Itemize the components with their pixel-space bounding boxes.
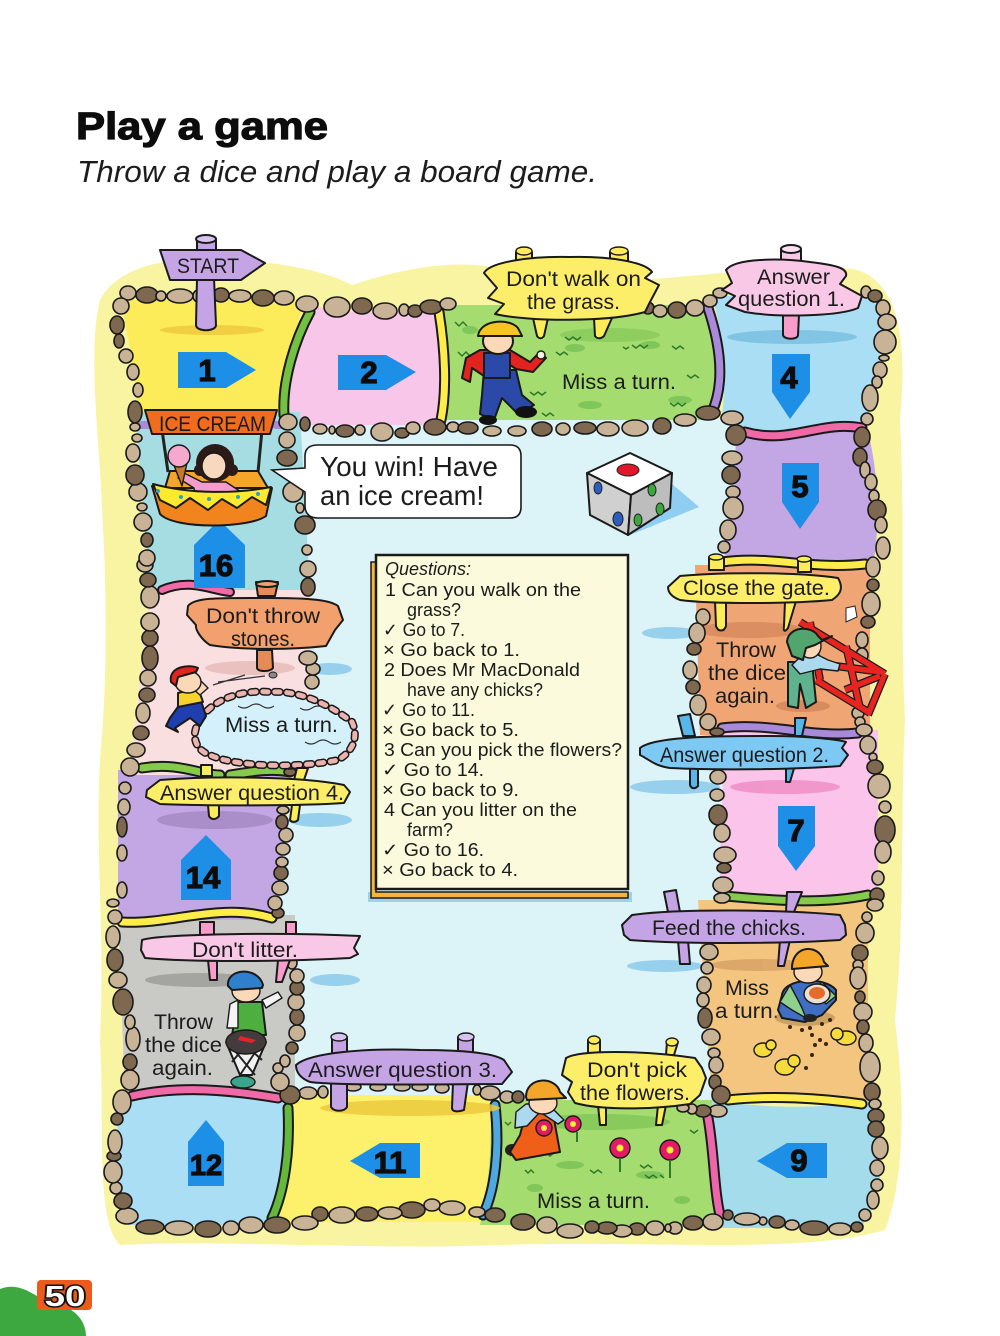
tile dividers	[122, 308, 868, 1218]
chicks and grain	[754, 1020, 856, 1075]
arrow 11: 11	[374, 1145, 406, 1180]
arrow 12	[188, 1120, 224, 1186]
pond: Miss a turn.	[225, 714, 338, 737]
sign: answer question 2: Answer question 2.	[660, 744, 829, 767]
tile 7	[720, 730, 878, 905]
sign shadows on the ground	[145, 325, 857, 1130]
text: miss a turn tile 3: Miss a turn.	[562, 371, 676, 394]
questions book: farm?	[407, 820, 453, 840]
arrow 4	[772, 354, 810, 419]
questions book: ✓ Go to 7.	[383, 620, 465, 640]
text: throw the dice again tile 6: the dice	[708, 662, 786, 685]
start sign	[160, 235, 265, 330]
dice	[587, 453, 699, 535]
speech bubble: You win! Have	[320, 451, 498, 482]
sign: close the gate	[668, 554, 841, 631]
board tiles	[117, 296, 881, 1228]
sign: don't pick the flowers	[562, 1036, 706, 1125]
character: farmer feeding chicks	[775, 949, 836, 1026]
arrow 2	[338, 355, 416, 390]
text: throw the dice again tile 13: again.	[152, 1057, 213, 1080]
board background	[94, 260, 905, 1246]
arrow 9	[757, 1143, 827, 1178]
sign: answer question 3: Answer question 3.	[308, 1059, 497, 1082]
arrow 9: 9	[790, 1143, 808, 1178]
arrow 5: 5	[791, 469, 809, 504]
questions book	[368, 555, 632, 902]
arrow 4: 4	[780, 360, 798, 395]
sign: answer question 1: Answer	[757, 266, 830, 289]
character: boy with gate	[776, 606, 885, 715]
tile 10	[480, 1100, 715, 1225]
sign: answer question 1: question 1.	[738, 288, 845, 311]
text: miss a turn tile 8: a turn.	[715, 1000, 779, 1023]
tile 9	[708, 1100, 881, 1228]
text: throw the dice again tile 13	[145, 1011, 222, 1080]
arrow 5	[782, 463, 819, 529]
tile 6	[695, 565, 870, 735]
sign: feed the chicks	[622, 890, 846, 966]
tile 8	[698, 900, 868, 1102]
tile 3	[442, 305, 721, 420]
character: boy throwing stones	[166, 666, 277, 732]
questions book: × Go back to 1.	[383, 640, 520, 660]
tile 1	[122, 300, 305, 412]
tile 16	[135, 412, 310, 590]
ice cream label	[145, 410, 277, 434]
sign: don't throw stones: stones.	[231, 628, 295, 651]
sign: feed the chicks: Feed the chicks.	[652, 917, 806, 940]
questions book: 1 Can you walk on the	[385, 580, 581, 600]
tile 13	[118, 915, 295, 1095]
questions book: × Go back to 5.	[382, 720, 519, 740]
questions book: Questions:	[385, 559, 471, 579]
grass tufts tile 10	[505, 1122, 698, 1204]
tile 5	[722, 430, 878, 570]
text: throw the dice again tile 13: the dice	[145, 1034, 222, 1057]
sign: don't throw stones: Don't throw	[206, 605, 321, 628]
character: girl picking flowers	[505, 1081, 566, 1160]
sign: answer question 4	[146, 765, 350, 822]
pond	[195, 692, 355, 765]
sign: don't pick the flowers: the flowers.	[580, 1082, 690, 1105]
arrow 7	[778, 806, 815, 871]
start sign: START	[177, 255, 239, 278]
sign: answer question 2	[640, 714, 848, 788]
questions book: grass?	[407, 600, 461, 620]
text: miss a turn tile 8	[715, 977, 779, 1023]
arrow 1	[178, 352, 256, 388]
sign: answer question 4: Answer question 4.	[160, 782, 344, 805]
arrow 1: 1	[198, 353, 216, 388]
arrow 14	[181, 835, 231, 900]
questions book: ✓ Go to 16.	[382, 840, 484, 860]
page corner leaf	[0, 1287, 86, 1336]
tile 4	[712, 296, 881, 434]
questions book: ✓ Go to 14.	[382, 760, 484, 780]
arrow 16	[194, 520, 245, 588]
arrow 7: 7	[787, 813, 805, 848]
arrow 11	[350, 1143, 420, 1180]
questions book: ✓ Go to 11.	[382, 700, 475, 720]
centre playing field	[280, 418, 745, 1105]
character: boy walking on grass	[462, 322, 546, 425]
subtitle: Throw a dice and play a board game.	[77, 154, 597, 189]
arrow 16: 16	[199, 548, 233, 583]
questions book: 4 Can you litter on the	[384, 800, 577, 820]
flowers	[565, 1116, 680, 1178]
sign: don't walk on the grass: Don't walk on	[506, 268, 641, 291]
tile 11	[270, 1095, 491, 1222]
text: miss a turn tile 8: Miss	[725, 977, 769, 1000]
ice cream stand	[145, 410, 277, 526]
sign: don't walk on the grass: the grass.	[527, 291, 620, 314]
arrow 14: 14	[186, 860, 221, 895]
character: boy with litter bin	[226, 972, 282, 1088]
text: throw the dice again tile 13: Throw	[154, 1011, 214, 1034]
sign: don't litter	[141, 922, 360, 982]
sign: answer question 3	[296, 1033, 512, 1111]
speech bubble: an ice cream!	[320, 480, 484, 511]
tile 12	[117, 1090, 287, 1225]
grass tufts tile 3	[455, 322, 699, 416]
questions book: 2 Does Mr MacDonald	[384, 660, 580, 680]
text: miss a turn tile 10: Miss a turn.	[537, 1190, 650, 1213]
blue arrows with numbers	[178, 352, 827, 1186]
sign: don't walk on the grass	[484, 247, 659, 338]
text: throw the dice again tile 6	[708, 639, 786, 708]
speech bubble	[272, 445, 521, 518]
sign: don't litter: Don't litter.	[192, 939, 298, 962]
arrow 12: 12	[190, 1150, 222, 1182]
questions book: 3 Can you pick the flowers?	[384, 740, 622, 760]
title: Play a game	[76, 106, 328, 148]
text: throw the dice again tile 6: again.	[715, 685, 775, 708]
girl	[168, 444, 246, 510]
text: throw the dice again tile 6: Throw	[716, 639, 777, 662]
page number: 50	[44, 1281, 86, 1313]
sign: answer question 1	[722, 245, 862, 339]
tile 14	[118, 770, 290, 920]
tile 2	[290, 305, 445, 425]
questions book: × Go back to 4.	[382, 860, 518, 880]
sign: don't throw stones	[187, 581, 343, 671]
ice cream stand: ICE CREAM	[159, 413, 266, 436]
questions book: × Go back to 9.	[382, 780, 519, 800]
sign: close the gate: Close the gate.	[683, 577, 830, 600]
tile 15	[130, 585, 310, 775]
page number	[37, 1280, 92, 1313]
stone border	[104, 286, 896, 1238]
questions book: have any chicks?	[407, 680, 543, 700]
sign: don't pick the flowers: Don't pick	[587, 1059, 688, 1082]
arrow 2: 2	[360, 355, 378, 390]
